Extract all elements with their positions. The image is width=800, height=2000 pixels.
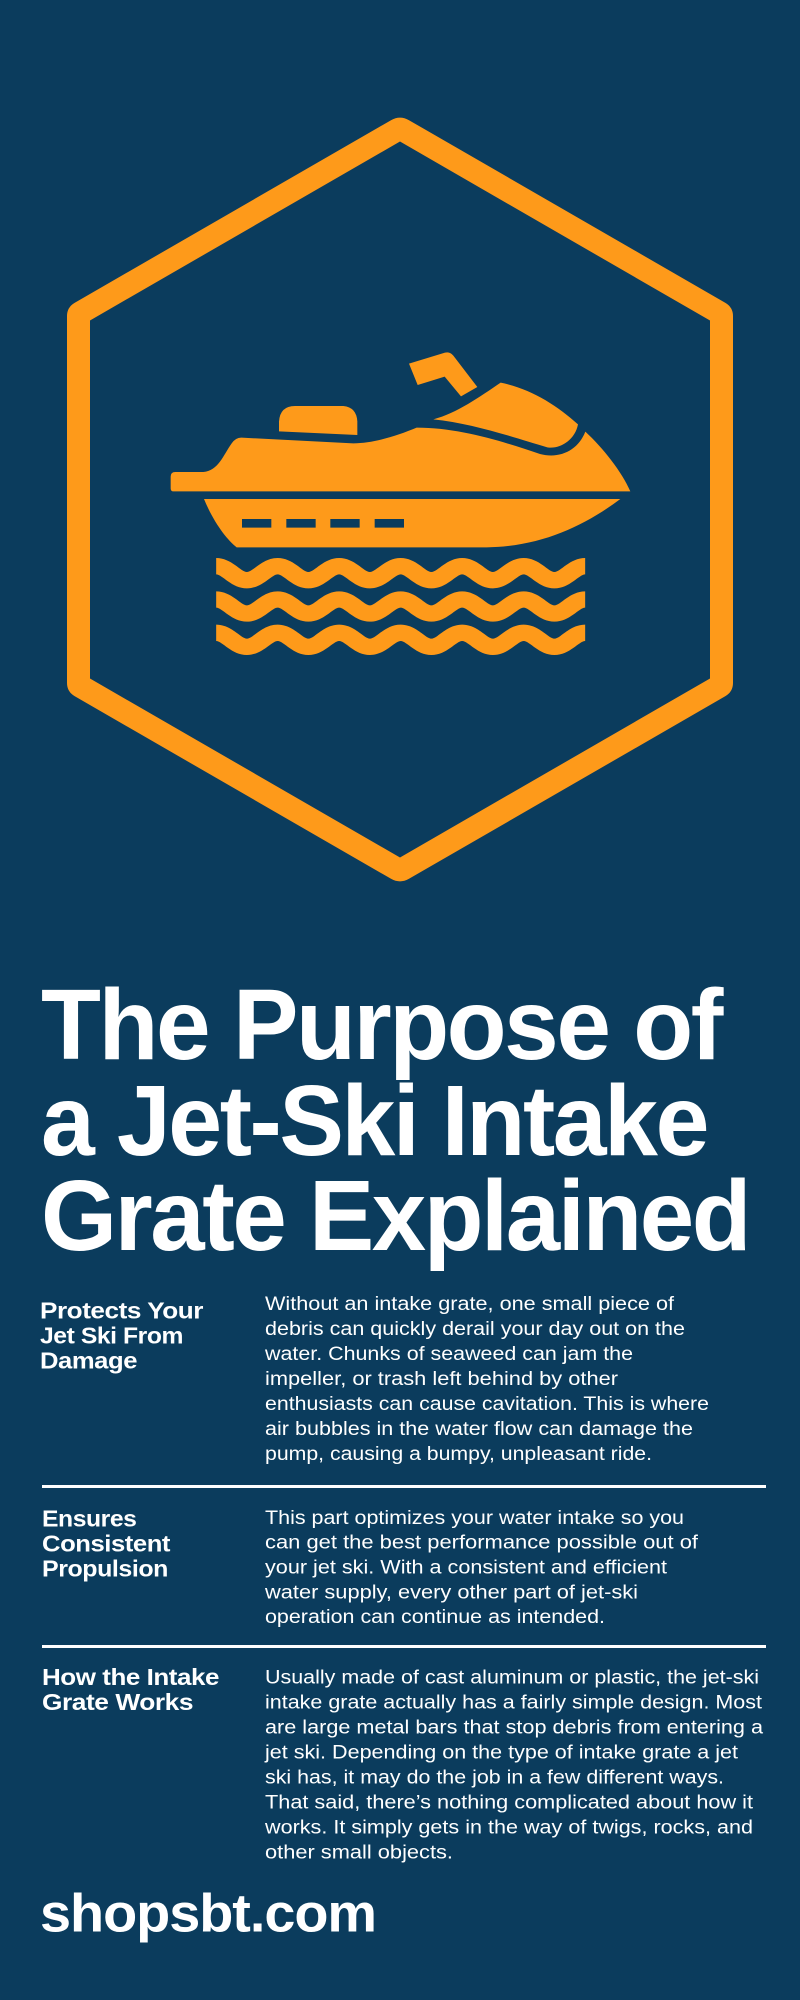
body text: propulsion: can get the best performance possible out of <box>265 1532 699 1554</box>
water waves <box>216 558 585 655</box>
body text: damage: debris can quickly derail your day out on the <box>265 1318 685 1340</box>
footer website url: shopsbt.com <box>40 1884 376 1944</box>
body text: how it works: works. It simply gets in the way of twigs, rocks, and <box>264 1816 753 1838</box>
jet ski seat <box>279 406 357 435</box>
section: how the intake grate works <box>42 1664 763 1863</box>
body text: how it works: ski has, it may do the job in a few different ways. <box>265 1766 724 1788</box>
body text: damage: pump, causing a bumpy, unpleasant ride. <box>265 1443 652 1465</box>
heading: ensures consistent propulsion: Ensures <box>42 1506 136 1532</box>
icon: hexagon frame <box>67 118 733 881</box>
heading: how the intake grate works <box>42 1664 219 1715</box>
section: protects your jet ski <box>40 1293 709 1465</box>
body text: damage: air bubbles in the water flow can damage the <box>265 1418 693 1440</box>
title: The Purpose of <box>41 969 724 1081</box>
body text: how it works: That said, there’s nothing complicated about how it <box>265 1791 754 1813</box>
body text: damage <box>264 1293 709 1465</box>
jet ski hood <box>433 383 578 448</box>
body text: propulsion: water supply, every other part of jet-ski <box>264 1581 638 1603</box>
jet ski handlebar <box>409 352 477 396</box>
body text: damage: impeller, or trash left behind by other <box>265 1368 619 1390</box>
title: a Jet-Ski Intake <box>41 1065 707 1177</box>
body text: damage: water. Chunks of seaweed can jam the <box>264 1343 633 1365</box>
body text: damage: Without an intake grate, one small piece of <box>265 1293 675 1315</box>
body text: propulsion: This part optimizes your water intake so you <box>265 1507 684 1529</box>
title <box>41 969 749 1272</box>
body text: how it works: other small objects. <box>265 1841 453 1863</box>
heading: protects your jet ski from damage <box>40 1297 204 1373</box>
heading: ensures consistent propulsion: Propulsion <box>42 1556 168 1582</box>
body text: how it works: Usually made of cast aluminum or plastic, the jet-ski <box>265 1666 759 1688</box>
heading: protects your jet ski from damage: Jet Ski From <box>40 1322 183 1348</box>
jet ski hull with slots <box>204 499 620 547</box>
heading: ensures consistent propulsion <box>42 1506 171 1582</box>
heading: ensures consistent propulsion: Consistent <box>42 1531 171 1557</box>
heading: protects your jet ski from damage: Protects Your <box>40 1297 204 1323</box>
body text: how it works: are large metal bars that stop debris from entering a <box>265 1716 763 1738</box>
body text: propulsion <box>264 1507 699 1628</box>
heading: how the intake grate works: Grate Works <box>42 1689 193 1715</box>
body text: how it works: intake grate actually has a fairly simple design. Most <box>265 1691 763 1713</box>
body text: how it works <box>264 1666 763 1863</box>
body text: propulsion: your jet ski. With a consistent and efficient <box>265 1556 668 1578</box>
heading: how the intake grate works: How the Intake <box>42 1664 219 1690</box>
body text: damage: enthusiasts can cause cavitation. This is where <box>265 1393 709 1415</box>
body text: how it works: jet ski. Depending on the type of intake grate a jet <box>264 1741 739 1763</box>
jet ski body <box>171 428 630 491</box>
body text: propulsion: operation can continue as intended. <box>265 1606 605 1628</box>
icon: jet ski on water <box>171 352 630 655</box>
heading: protects your jet ski from damage: Damage <box>40 1347 137 1373</box>
title: Grate Explained <box>41 1160 749 1272</box>
section: ensures consistent propulsion <box>42 1506 699 1628</box>
